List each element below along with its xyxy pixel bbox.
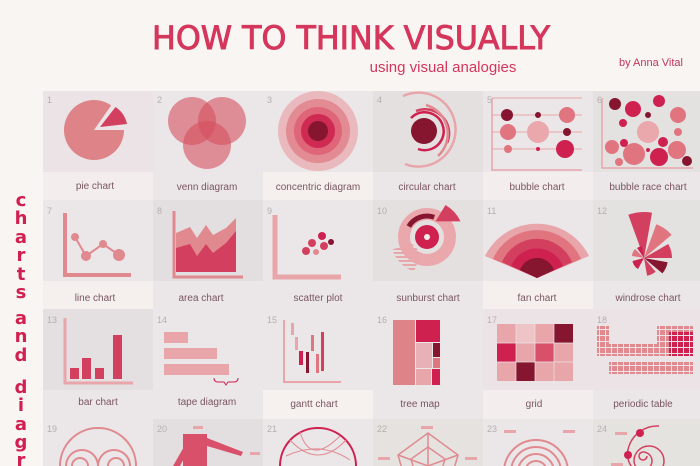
cell labels: bubble race chart [609,182,687,193]
cell numbers: 6 [597,95,602,105]
icon: bubble chart [492,98,582,170]
cell numbers: 3 [267,95,272,105]
cell numbers: 14 [157,315,167,325]
cell numbers: 11 [487,206,496,216]
cell numbers [47,95,607,434]
cell labels: periodic table [613,399,673,410]
icon: windrose chart [628,212,672,276]
cell numbers: 15 [267,315,277,325]
vertical side title: c [16,190,26,211]
cell labels: venn diagram [177,182,237,193]
cell labels: concentric diagram [276,182,360,193]
vertical side title: i [18,395,24,416]
cell labels: circular chart [398,182,456,193]
cell numbers: 17 [487,315,497,325]
cell labels [75,181,687,410]
vertical side title: a [15,308,27,329]
cell numbers: 4 [377,95,382,105]
cell numbers: 19 [47,424,57,434]
icon: circular chart [403,93,456,167]
cell numbers: 23 [487,424,497,434]
icon: chord diagram [280,428,356,466]
icon: venn diagram [168,97,246,169]
icon: gantt chart [284,320,341,382]
cell labels: area chart [178,293,224,304]
cell numbers: 10 [377,206,387,216]
cell labels: sunburst chart [396,293,460,304]
icon: grid [497,324,573,381]
icon: tree map [393,320,440,385]
icon: bar chart [65,318,133,383]
icon: circular target [504,430,575,466]
icon: concentric diagram [278,91,358,171]
vertical side title: r [17,245,26,266]
vertical side title: h [15,208,27,229]
cell numbers: 22 [377,424,387,434]
icon: arc diagram [60,428,136,466]
vertical side title [15,196,26,466]
grid background [43,91,700,466]
byline: by Anna Vital [619,57,683,69]
cell labels: bubble chart [509,182,565,193]
cell numbers: 7 [47,206,52,216]
subtitle: using visual analogies [370,59,516,76]
title: HOW TO THINK VISUALLY [152,19,550,57]
cell numbers: 13 [47,315,57,325]
cell labels: tree map [400,399,440,410]
icon: periodic table [597,326,693,374]
icon: bubble race chart [602,95,693,168]
vertical side title: d [15,345,27,366]
icon: scatter plot [275,215,341,277]
icon: fan chart [485,224,589,278]
cell labels: fan chart [518,293,557,304]
cell numbers: 1 [47,95,52,105]
vertical side title: a [15,227,27,248]
cell numbers: 21 [267,424,277,434]
cell labels: windrose chart [614,293,681,304]
cell numbers: 20 [157,424,167,434]
vertical side title: a [15,414,27,435]
vertical side title: n [15,326,27,347]
icon: spiral [611,426,664,466]
icon: sankey diagram [173,426,260,466]
icon: area chart [174,211,243,277]
cell numbers: 18 [597,315,607,325]
icon: radar chart [378,426,477,466]
vertical side title: d [15,377,27,398]
cell numbers: 5 [487,95,492,105]
vertical side title: t [17,264,26,285]
cell numbers: 16 [377,315,387,325]
cell labels: tape diagram [178,397,236,408]
cell labels: scatter plot [294,293,343,304]
icon: sunburst chart [392,205,460,272]
cell numbers: 8 [157,206,162,216]
cell labels: bar chart [78,397,118,408]
icon: tape diagram [164,332,238,385]
cell labels: gantt chart [290,399,338,410]
cell numbers: 12 [597,206,607,216]
icon: line chart [65,213,131,275]
icon: pie chart [64,100,127,160]
cell labels: grid [526,399,542,410]
cell labels: pie chart [76,181,114,192]
vertical side title: s [16,282,26,303]
cell numbers: 24 [597,424,607,434]
vertical side title: g [15,432,27,453]
cell labels: line chart [75,293,116,304]
cell numbers: 9 [267,206,272,216]
cell numbers: 2 [157,95,162,105]
